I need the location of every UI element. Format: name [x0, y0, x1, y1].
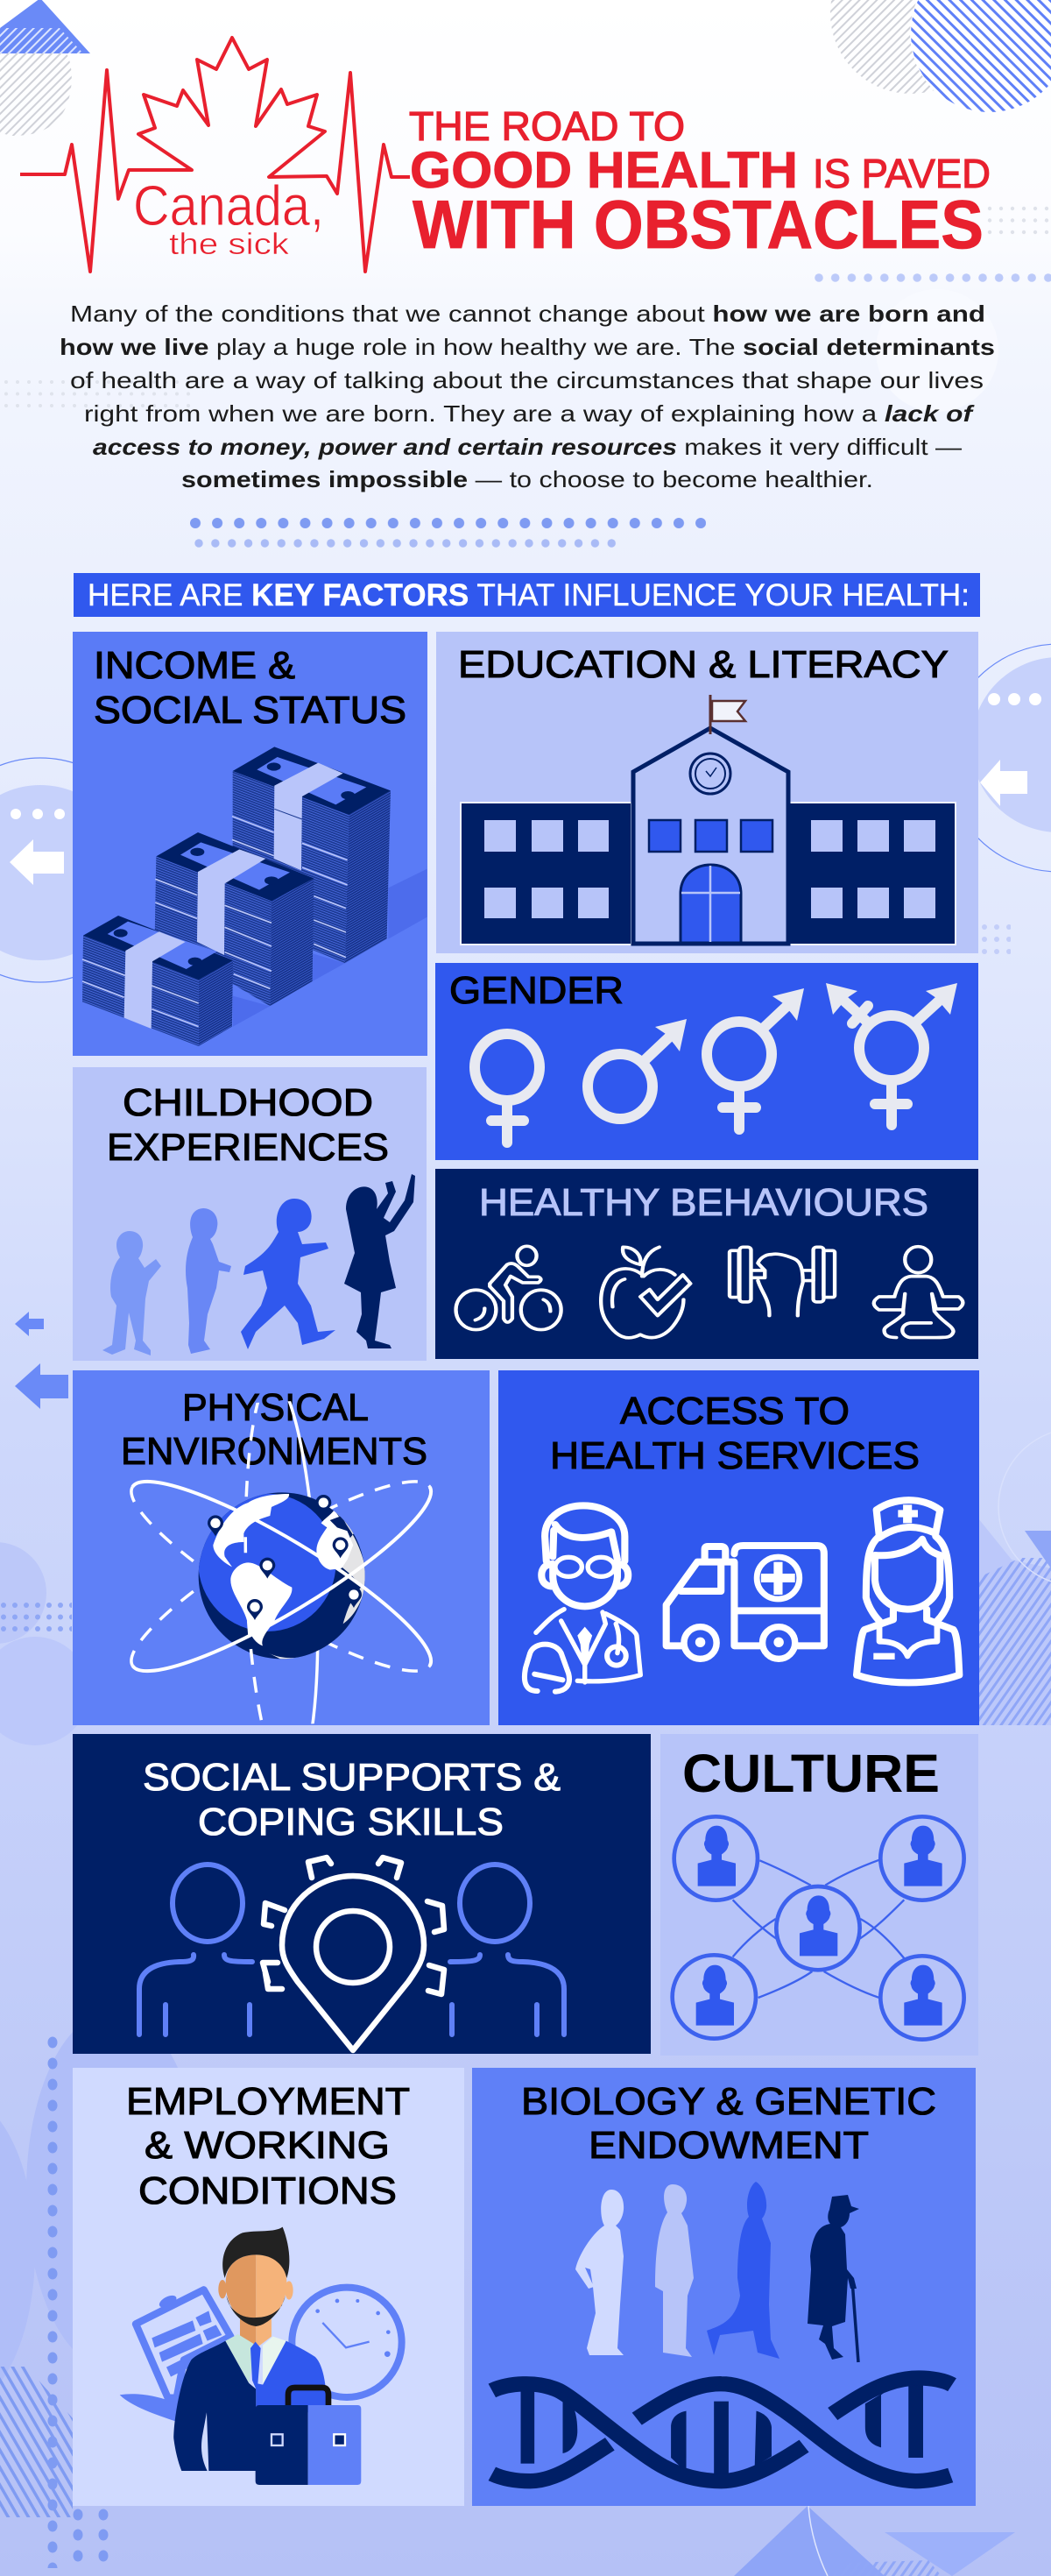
- logo wordmark: the sick: [169, 228, 290, 261]
- heading: healthy behaviours: HEALTHY BEHAVIOURS: [479, 1181, 928, 1224]
- intro paragraph: [60, 301, 995, 492]
- heading: access: ACCESS TO: [620, 1390, 850, 1433]
- school flag: [710, 695, 745, 734]
- panel: social supports and coping skills: [73, 1734, 651, 2054]
- icon: map pin with gear: [263, 1858, 444, 2050]
- icon: globe with orbits and pins: [130, 1401, 433, 1724]
- panel: childhood experiences: [73, 1067, 427, 1361]
- heading: childhood: [107, 1081, 389, 1169]
- intro paragraph: sometimes impossible — to choose to become healthier.: [181, 466, 873, 492]
- icon: doctor: [525, 1505, 640, 1692]
- icon: cyclist: [456, 1246, 561, 1330]
- icon: DNA helix: [492, 2378, 952, 2481]
- heading: social supports: [143, 1756, 561, 1844]
- title: THE ROAD TO: [409, 103, 685, 149]
- title: IS PAVED: [813, 151, 991, 196]
- globe: [198, 1492, 366, 1660]
- icon: children silhouettes: [102, 1174, 415, 1355]
- icon: nurse: [857, 1500, 959, 1682]
- panel: gender: [435, 963, 978, 1160]
- panel: employment and working conditions: [73, 2068, 464, 2506]
- map pins: [208, 1495, 362, 1620]
- heading: access: HEALTH SERVICES: [550, 1434, 920, 1477]
- intro paragraph: how we live play a huge role in how healthy we are. The social determinants: [60, 334, 995, 360]
- icon: two people: [139, 1865, 564, 2035]
- banner: HERE ARE KEY FACTORS THAT INFLUENCE YOUR HEALTH:: [88, 578, 970, 612]
- heading: biology: BIOLOGY & GENETIC: [521, 2080, 936, 2123]
- heading: physical environments: PHYSICAL: [182, 1386, 369, 1429]
- heading: social supports: SOCIAL SUPPORTS &: [143, 1756, 561, 1799]
- intro paragraph: right from when we are born. They are a way of explaining how a lack of: [84, 400, 975, 427]
- icon: businessman: [120, 2227, 402, 2485]
- heading: employment: EMPLOYMENT: [126, 2080, 410, 2123]
- icon: money stacks: [82, 747, 427, 1046]
- icon: ageing silhouettes: [575, 2182, 859, 2362]
- back stack: [232, 747, 391, 963]
- panel: healthy behaviours: [435, 1169, 978, 1359]
- heading: access: [550, 1390, 920, 1477]
- front stack: [82, 916, 233, 1046]
- man: [173, 2227, 327, 2471]
- icon: apple with check: [601, 1247, 690, 1338]
- heading: social supports: COPING SKILLS: [198, 1801, 504, 1844]
- heading: education: EDUCATION & LITERACY: [458, 643, 949, 686]
- heading: income: INCOME &: [94, 644, 295, 687]
- panel: biology and genetic endowment: [472, 2068, 976, 2506]
- intro paragraph: access to money, power and certain resources makes it very difficult —: [93, 434, 962, 460]
- panel: culture: [660, 1734, 978, 2056]
- icon: ambulance: [667, 1546, 824, 1659]
- panel: physical environments: [73, 1370, 490, 1725]
- school door: [681, 865, 741, 943]
- panel: access to health services: [498, 1370, 979, 1725]
- heading: biology: [521, 2080, 936, 2167]
- icons: health services: [525, 1500, 959, 1692]
- intro paragraph: Many of the conditions that we cannot change about how we are born and: [70, 301, 985, 327]
- intro paragraph: of health are a way of talking about the circumstances that shape our lives: [70, 367, 984, 393]
- heading: physical environments: [121, 1386, 427, 1473]
- title: WITH OBSTACLES: [413, 186, 984, 263]
- icon: fist with dumbbell: [730, 1247, 835, 1316]
- heading: income: [94, 644, 406, 732]
- briefcase: [256, 2388, 361, 2485]
- dotted divider: [190, 517, 706, 548]
- heading: income: SOCIAL STATUS: [94, 689, 406, 732]
- title: [409, 103, 991, 263]
- heading: gender: GENDER: [449, 969, 624, 1012]
- heading: culture: CULTURE: [682, 1744, 940, 1803]
- clock: [292, 2288, 402, 2397]
- clipboard: [120, 2289, 230, 2421]
- icon: people network: [673, 1816, 964, 2040]
- icons: activity row: [456, 1246, 963, 1338]
- icon: meditation figure: [874, 1247, 963, 1338]
- icon: school building: [461, 695, 956, 945]
- icon: gender symbols: [475, 983, 957, 1143]
- middle stack: [155, 832, 314, 1006]
- heading: employment: & WORKING: [145, 2124, 390, 2167]
- logo: heartbeat maple leaf: [20, 38, 410, 272]
- panel: income and social status: [73, 632, 427, 1056]
- heading: childhood: CHILDHOOD: [123, 1081, 373, 1124]
- school clock: [690, 754, 730, 794]
- icon: heartbeat and maple leaf line: [20, 38, 410, 272]
- heading: employment: CONDITIONS: [138, 2169, 397, 2212]
- panel: education and literacy: [436, 632, 978, 953]
- title: GOOD HEALTH: [410, 142, 798, 199]
- heading: employment: [126, 2080, 410, 2212]
- heading: physical environments: ENVIRONMENTS: [121, 1430, 427, 1473]
- logo wordmark: Canada,: [133, 173, 324, 237]
- heading: biology: ENDOWMENT: [589, 2124, 869, 2167]
- heading: childhood: EXPERIENCES: [107, 1126, 389, 1169]
- logo wordmark: [133, 173, 324, 261]
